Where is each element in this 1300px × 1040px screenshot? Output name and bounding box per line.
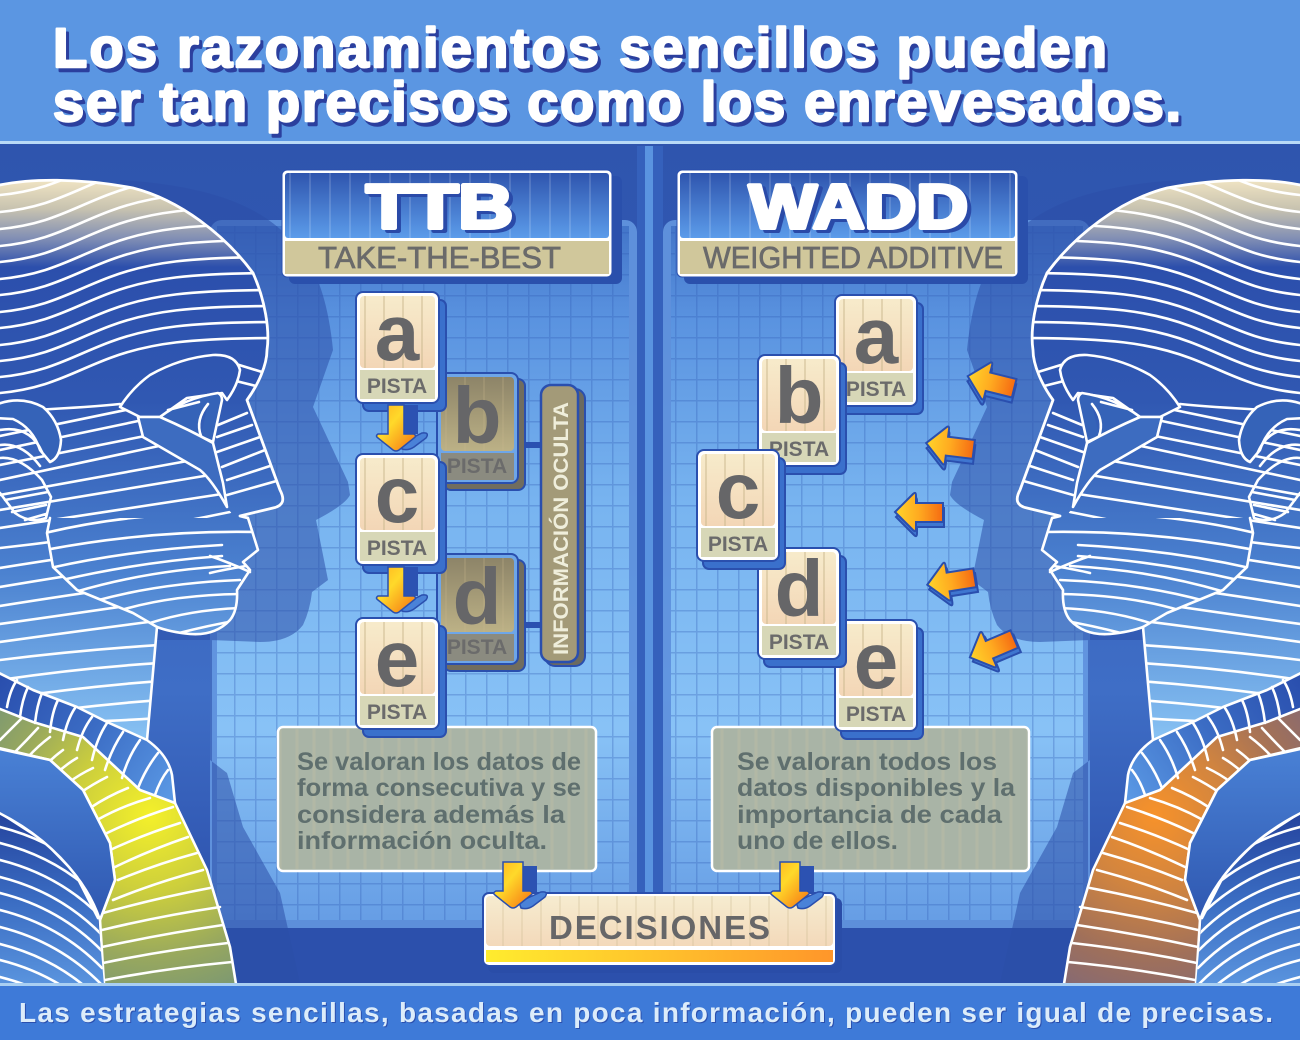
- card e, WADD: [835, 616, 923, 739]
- arrow to decisions, right: [771, 862, 823, 909]
- card b, WADD: PISTA: [769, 438, 829, 461]
- nose: [213, 388, 283, 516]
- arrow a to c: [376, 405, 427, 451]
- hidden information bar: [541, 385, 585, 666]
- arrow to decisions, left: [494, 862, 546, 909]
- neck line: [147, 627, 157, 740]
- card a, WADD: PISTA: [846, 378, 906, 401]
- shadow silhouette: right head: [950, 180, 1180, 983]
- connector lines to hidden information bar: [518, 445, 545, 625]
- collar: [0, 671, 175, 803]
- decisions box: DECISIONES: [549, 909, 770, 946]
- card c, WADD: c: [716, 446, 760, 535]
- description box left: [278, 727, 596, 871]
- shoulder outlines: [0, 747, 236, 984]
- description box right: Se valoran todos los: [737, 748, 997, 776]
- TTB subtitle: TAKE-THE-BEST: [318, 240, 561, 275]
- hidden card b: PISTA: [447, 455, 507, 478]
- gaze arrow 1: [962, 358, 1020, 411]
- ear: [0, 400, 61, 520]
- hidden card d: [437, 552, 525, 671]
- gaze arrow 3: [895, 493, 944, 536]
- person: right profile (mirrored): [1017, 140, 1300, 1035]
- eye socket: [120, 355, 240, 417]
- TTB heading: TTB: [366, 173, 513, 242]
- eye: [160, 393, 222, 442]
- decisions box: [483, 893, 842, 973]
- card a, TTB: a: [375, 288, 420, 377]
- description box left: información oculta.: [297, 827, 547, 855]
- card a, WADD: a: [854, 291, 899, 380]
- shadow silhouette: left head: [120, 180, 350, 983]
- WADD subtitle: WEIGHTED ADDITIVE: [703, 240, 1003, 275]
- cheek band: [138, 417, 227, 507]
- card a, TTB: [356, 288, 446, 411]
- card e, TTB: PISTA: [367, 701, 427, 724]
- header box: TTB: [282, 170, 622, 284]
- card a, WADD: [835, 291, 923, 414]
- footer band: Las estrategias sencillas, basadas en poca información, pueden ser igual de precisas.: [19, 997, 1273, 1028]
- description box right: uno de ellos.: [737, 827, 898, 855]
- card c, TTB: PISTA: [367, 537, 427, 560]
- hidden card d: d: [453, 552, 501, 641]
- card a, TTB: PISTA: [367, 375, 427, 398]
- hidden card d: PISTA: [447, 636, 507, 659]
- arrow c to e: [376, 567, 427, 613]
- description box left: considera además la: [297, 801, 566, 829]
- description box left: forma consecutiva y se: [297, 774, 581, 802]
- card c, WADD: [697, 446, 785, 569]
- panel: right grid: [663, 220, 1090, 928]
- card e, TTB: e: [375, 614, 419, 703]
- left head and torso lines: [0, 140, 283, 1035]
- WADD heading: WADD: [749, 173, 968, 242]
- header band: [0, 0, 1300, 141]
- hidden card b: b: [453, 371, 501, 460]
- chest bump: [0, 748, 115, 920]
- card d, WADD: PISTA: [769, 631, 829, 654]
- hidden card b: [437, 371, 525, 490]
- lower face: [45, 513, 258, 634]
- hidden information bar: INFORMACIÓN OCULTA: [549, 402, 573, 655]
- card d, WADD: d: [775, 544, 823, 633]
- gaze arrow 5: [962, 621, 1024, 680]
- card c, TTB: [356, 450, 446, 573]
- card e, WADD: PISTA: [846, 703, 906, 726]
- centre divider: [637, 146, 663, 928]
- gaze arrow 2: [923, 424, 977, 473]
- title: [53, 16, 1181, 133]
- chest lines: [0, 811, 104, 1035]
- card e, TTB: [356, 614, 446, 737]
- left shoulder colour band: [0, 707, 236, 984]
- card b, WADD: b: [775, 351, 823, 440]
- gaze arrow 4: [924, 558, 979, 609]
- footer band: [0, 983, 1300, 1040]
- description box right: [712, 727, 1029, 871]
- title: ser tan precisos como los enrevesados.: [53, 70, 1181, 133]
- card c, WADD: PISTA: [708, 533, 768, 556]
- panel: left grid: [210, 220, 637, 928]
- card e, WADD: e: [854, 616, 898, 705]
- description box right: datos disponibles y la: [737, 774, 1016, 802]
- title: Los razonamientos sencillos pueden: [53, 16, 1107, 79]
- card d, WADD: [758, 544, 846, 667]
- card b, WADD: [758, 351, 846, 474]
- shoulder rungs: [0, 718, 232, 980]
- header rule: [0, 141, 1300, 144]
- card c, TTB: c: [375, 450, 419, 539]
- header box: WADD: [677, 170, 1028, 284]
- person: left profile: [0, 140, 283, 1035]
- description box right: importancia de cada: [737, 801, 1003, 829]
- description box left: Se valoran los datos de: [297, 748, 581, 776]
